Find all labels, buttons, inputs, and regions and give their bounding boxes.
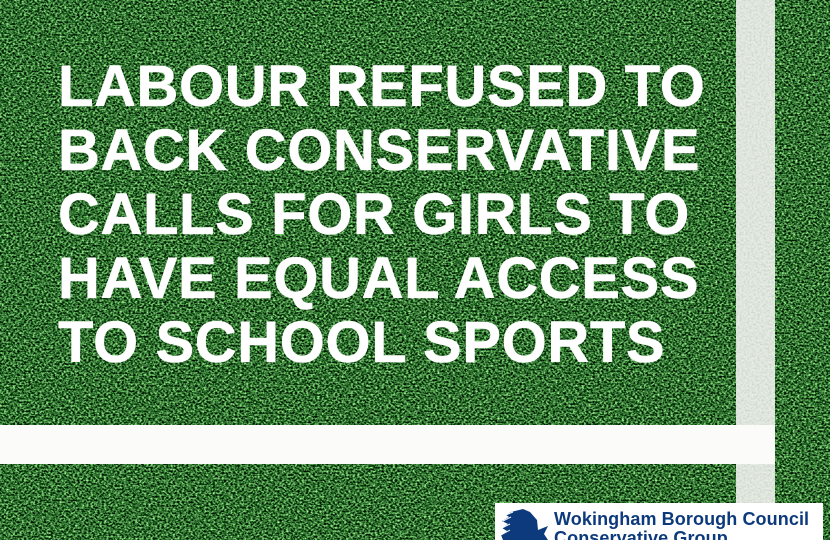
headline: HAVE EQUAL ACCESS xyxy=(58,246,699,311)
icon: blue scribbled tree xyxy=(501,509,548,540)
horizontal pitch line xyxy=(0,425,775,464)
logo text xyxy=(554,509,809,540)
headline: BACK CONSERVATIVE xyxy=(58,118,700,183)
headline: TO SCHOOL SPORTS xyxy=(58,310,665,375)
headline xyxy=(58,54,706,375)
vertical pitch line xyxy=(736,0,775,510)
logo panel: Wokingham Borough Council Conservative Group xyxy=(495,503,823,540)
headline: LABOUR REFUSED TO xyxy=(58,54,706,119)
logo panel: Wokingham Borough Council Conservative Group: Wokingham Borough Council xyxy=(554,509,809,529)
headline: CALLS FOR GIRLS TO xyxy=(58,182,690,247)
